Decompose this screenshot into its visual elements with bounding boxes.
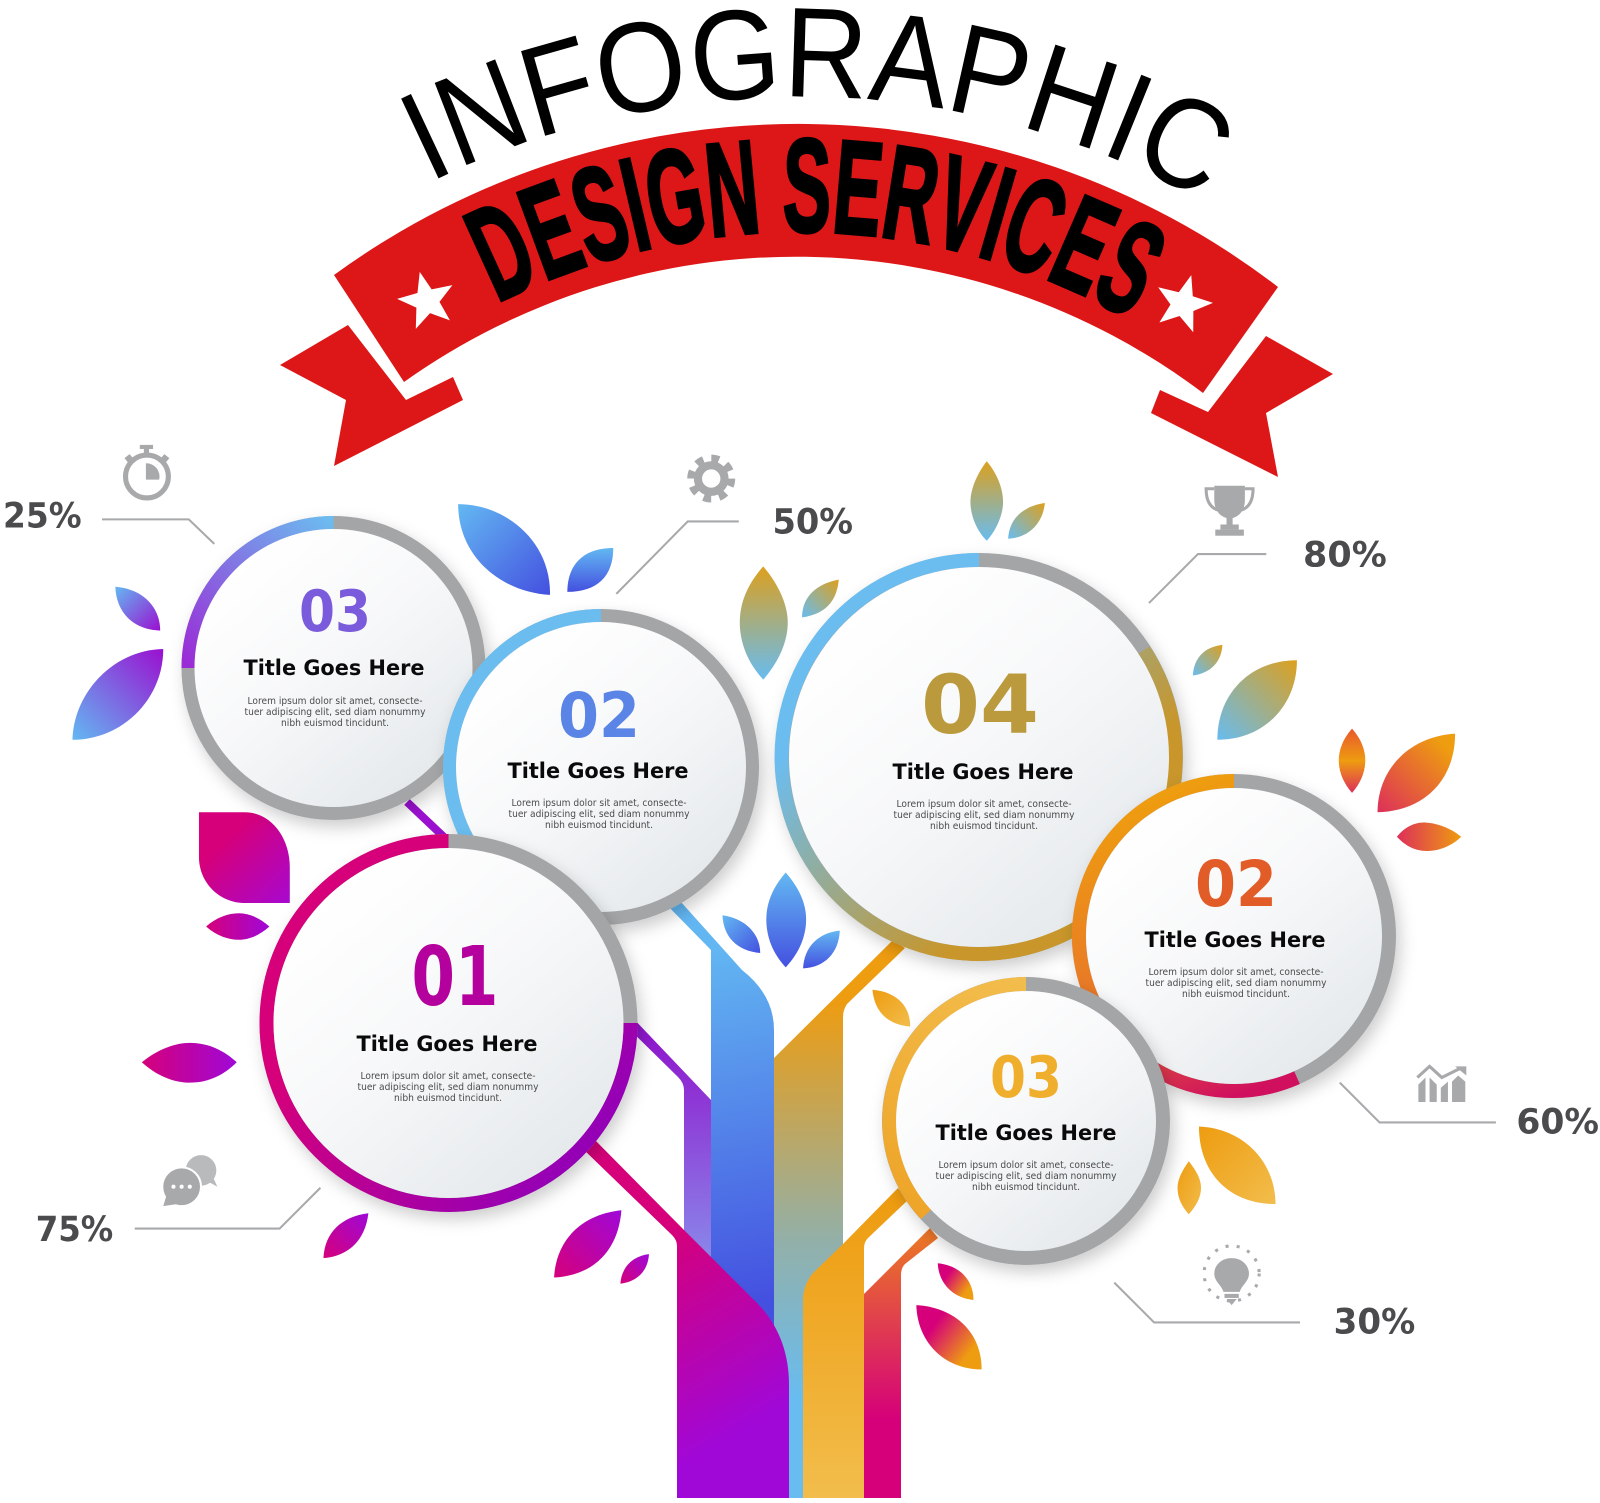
title: Title Goes Here [1144, 928, 1326, 952]
body text [1146, 967, 1327, 1000]
leaves [72, 461, 1461, 1369]
body text: Lorem ipsum dolor sit amet, consecte- [512, 798, 687, 809]
circle 01 [260, 834, 638, 1212]
body text [936, 1160, 1117, 1193]
callout 80% [1149, 486, 1387, 603]
number 04: 04 [921, 659, 1039, 753]
number 03: 03 [990, 1045, 1062, 1111]
callout 60% [1340, 1066, 1599, 1143]
icon: light bulb [1204, 1246, 1259, 1305]
leaf: gold small centre [802, 580, 839, 617]
title: Title Goes Here [936, 1121, 1116, 1145]
callouts [3, 445, 1599, 1343]
callout 75% [36, 1155, 320, 1250]
leaf: purple near 75% [323, 1213, 368, 1258]
body text: nibh euismod tincidunt. [281, 718, 389, 729]
body text: Lorem ipsum dolor sit amet, consecte- [938, 1160, 1114, 1171]
callout 50% [616, 458, 853, 594]
leaf: yellow vertical [1178, 1161, 1201, 1214]
title: Title Goes Here [892, 760, 1074, 784]
leaf: pink small [938, 1263, 973, 1300]
leaf: gold top [970, 461, 1003, 541]
number 01: 01 [412, 930, 498, 1025]
body text: Lorem ipsum dolor sit amet, consecte- [896, 799, 1072, 810]
icon: bar chart [1417, 1066, 1466, 1102]
body text: Lorem ipsum dolor sit amet, consecte- [1148, 967, 1324, 978]
leaf: gold right large [1217, 660, 1297, 740]
body text: tuer adipiscing elit, sed diam nonummy [894, 810, 1075, 821]
body text [244, 696, 426, 729]
body text: tuer adipiscing elit, sed diam nonummy [936, 1171, 1117, 1182]
callout 60%: 60% [1516, 1103, 1599, 1143]
body text: Lorem ipsum dolor sit amet, consecte- [360, 1071, 536, 1082]
body text: tuer adipiscing elit, sed diam nonummy [508, 809, 690, 820]
leaf: magenta near trunk small [620, 1254, 649, 1284]
branch: blue [662, 892, 774, 1340]
body text: tuer adipiscing elit, sed diam nonummy [244, 707, 426, 718]
title: Title Goes Here [356, 1032, 538, 1056]
body text: nibh euismod tincidunt. [1182, 989, 1290, 1000]
star right [1149, 267, 1219, 335]
leaf: magenta large [199, 812, 290, 903]
leaf: blue centre vertical [766, 872, 806, 967]
leaf: gold right small [1193, 645, 1222, 676]
callout 50%: 50% [772, 503, 853, 543]
icon: stopwatch [124, 445, 169, 498]
circle 04 [775, 553, 1183, 961]
body text: nibh euismod tincidunt. [545, 820, 653, 831]
circle 02 blue [443, 609, 759, 925]
tree trunk [407, 802, 938, 1498]
leaf: top-left small [115, 587, 160, 631]
body text [508, 798, 690, 831]
title: Title Goes Here [244, 656, 424, 680]
leaf: magenta near trunk [554, 1210, 621, 1278]
icon: chat bubbles [162, 1155, 217, 1206]
branch: yellow [803, 1188, 908, 1498]
body text [894, 799, 1075, 832]
leaf: orange large [1378, 734, 1455, 812]
leaf: gold large centre [740, 566, 788, 680]
banner text: DESIGN SERVICES [462, 136, 1164, 314]
banner ribbon [280, 124, 1333, 477]
leaf: blue small [567, 548, 613, 592]
branch: pink [864, 1228, 938, 1498]
branch: lilac [625, 1015, 711, 1290]
branch: stem to gold circle [774, 940, 905, 1498]
callout 80%: 80% [1303, 535, 1387, 575]
leaf: magenta horizontal [142, 1043, 237, 1083]
number 02: 02 [1195, 848, 1277, 921]
body text: Lorem ipsum dolor sit amet, consecte- [248, 696, 423, 707]
body text [358, 1071, 539, 1104]
callout 30%: 30% [1334, 1303, 1415, 1343]
body text: nibh euismod tincidunt. [972, 1182, 1080, 1193]
icon: trophy [1206, 486, 1253, 536]
leaf: pink large [916, 1305, 982, 1369]
body text: tuer adipiscing elit, sed diam nonummy [358, 1082, 539, 1093]
circle 03 top left [182, 516, 486, 820]
leaf: orange vertical [1339, 729, 1365, 793]
leaf: magenta small [206, 913, 269, 940]
number 02: 02 [558, 679, 640, 752]
ribbon right tail [1151, 336, 1333, 477]
circle 02 orange [1072, 774, 1396, 1098]
leaf: blue centre left [722, 915, 760, 953]
callout 30% [1114, 1246, 1415, 1343]
body text: tuer adipiscing elit, sed diam nonummy [1146, 978, 1327, 989]
leaf: top-left large [72, 649, 163, 740]
leaf: blue large [458, 504, 550, 595]
callout 25%: 25% [3, 497, 82, 537]
title: Title Goes Here [508, 759, 688, 783]
body text: nibh euismod tincidunt. [394, 1093, 502, 1104]
leaf: yellow large [1199, 1127, 1276, 1204]
callout 25% [3, 445, 214, 544]
circle 03 yellow [882, 977, 1170, 1265]
number 03: 03 [299, 579, 371, 645]
leaf: orange near yellow circle [872, 990, 910, 1027]
leaf: blue centre right [803, 931, 840, 968]
callout 75%: 75% [36, 1210, 113, 1250]
star left [392, 265, 461, 331]
icon: gear [691, 458, 732, 499]
leaf: gold top small [1008, 503, 1045, 539]
branch: top-left circle connector [407, 802, 445, 838]
ribbon arc [334, 124, 1278, 393]
ribbon left tail [280, 325, 463, 466]
leaf: orange horizontal [1397, 822, 1461, 851]
branch: magenta [582, 1135, 789, 1498]
body text: nibh euismod tincidunt. [930, 821, 1038, 832]
